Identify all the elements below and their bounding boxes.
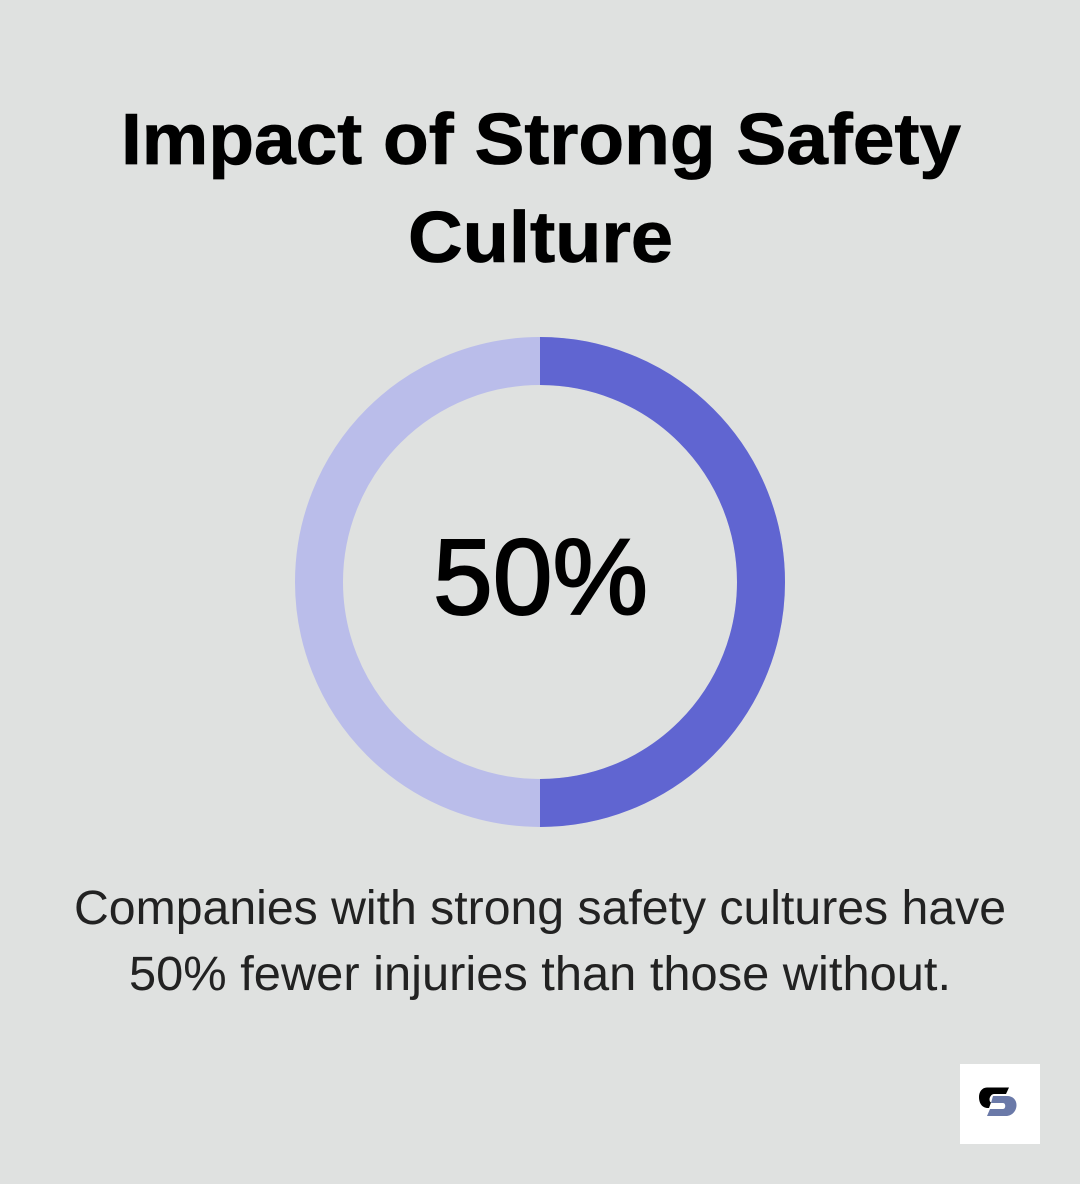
title xyxy=(121,100,961,278)
description text: Companies with strong safety cultures have xyxy=(74,882,1006,935)
title: Culture xyxy=(408,198,673,278)
center value: 50% xyxy=(433,516,648,637)
logo badge xyxy=(960,1064,1040,1144)
description text: 50% fewer injuries than those without. xyxy=(129,948,951,1001)
description text xyxy=(74,882,1006,1001)
title: Impact of Strong Safety xyxy=(121,100,961,180)
donut chart: 50% xyxy=(319,361,761,803)
